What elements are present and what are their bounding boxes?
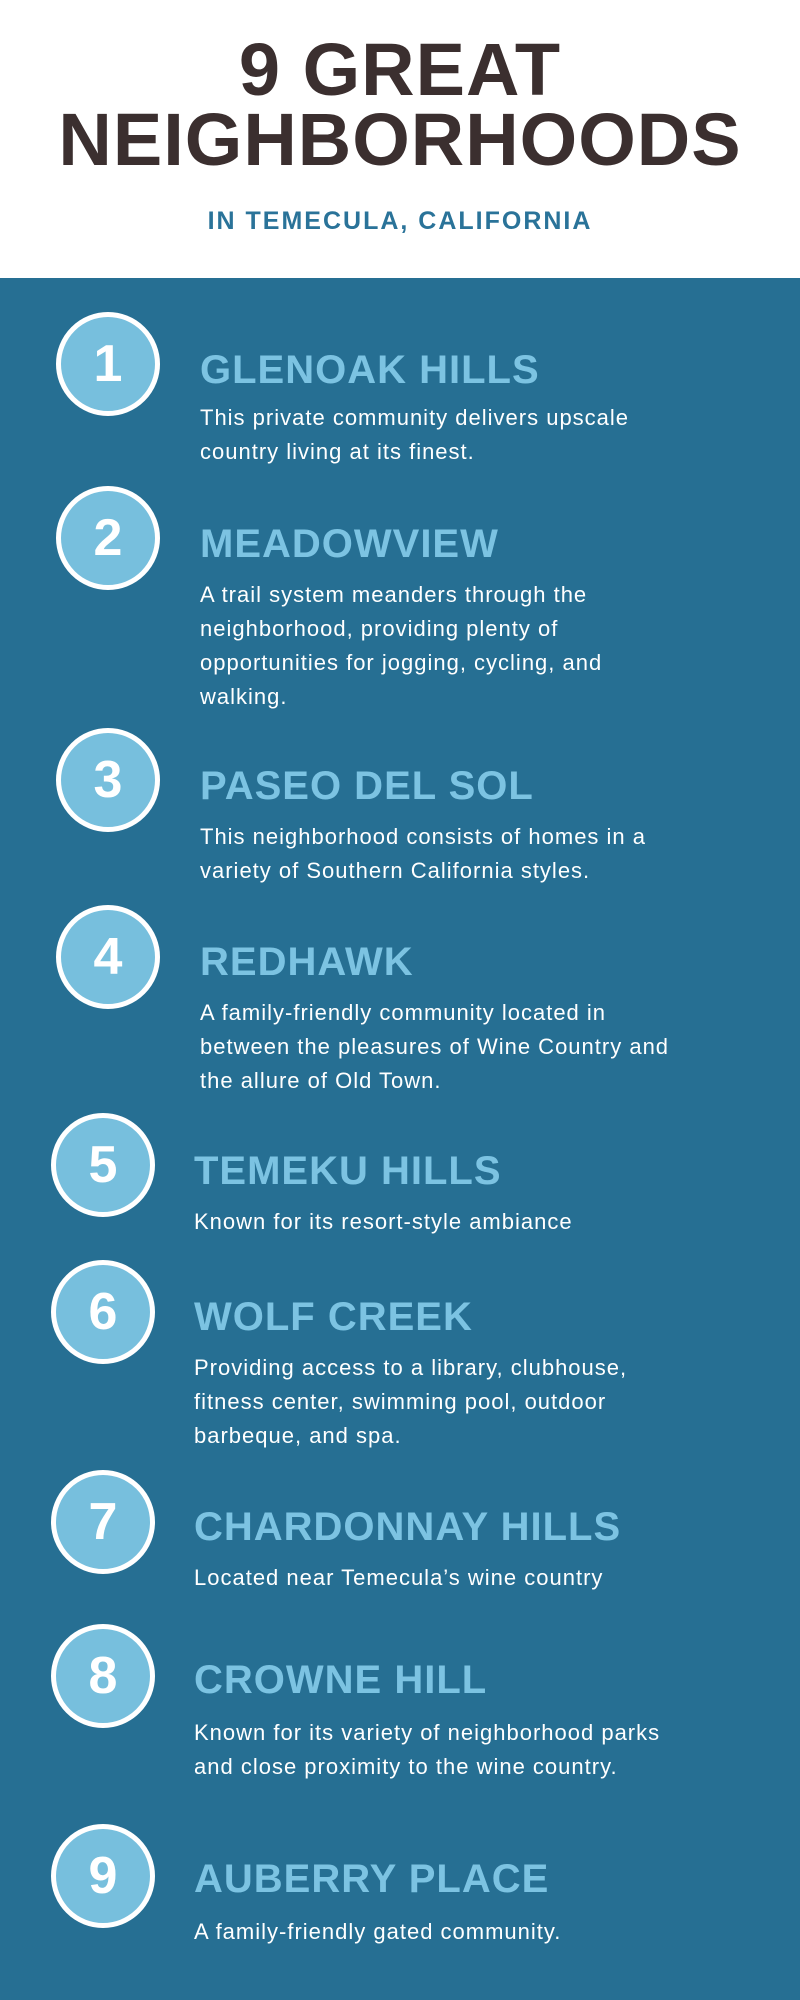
icon: circle 8: 8	[89, 1647, 117, 1705]
item 8	[51, 1624, 660, 1779]
item 2	[56, 486, 602, 709]
heading 9: AUBERRY PLACE	[194, 1857, 549, 1901]
item 1	[56, 312, 629, 464]
text 8: Known for its variety of neighborhood parks and close proximity to the wine country.	[194, 1720, 660, 1779]
item 9	[51, 1824, 561, 1944]
item 6	[51, 1260, 627, 1448]
icon: circle 3: 3	[94, 751, 122, 809]
icon: circle 1	[56, 312, 160, 416]
text 6: Providing access to a library, clubhouse, fitness center, swimming pool, outdoor barbeque, and spa.	[194, 1355, 627, 1448]
icon: circle 6: 6	[89, 1283, 117, 1341]
item 7	[51, 1470, 621, 1590]
icon: circle 2: 2	[94, 509, 122, 567]
icon: circle 5	[51, 1113, 155, 1217]
icon: circle 9	[51, 1824, 155, 1928]
item 4	[56, 905, 669, 1093]
icon: circle 3	[56, 728, 160, 832]
text 2: A trail system meanders through the neighborhood, providing plenty of opportunities for jogging, cycling, and walking.	[200, 582, 602, 709]
item 5	[51, 1113, 573, 1234]
heading 4: REDHAWK	[200, 940, 414, 984]
icon: circle 7	[51, 1470, 155, 1574]
heading 3: PASEO DEL SOL	[200, 764, 534, 808]
title: NEIGHBORHOODS	[58, 98, 742, 181]
icon: circle 2	[56, 486, 160, 590]
heading 5: TEMEKU HILLS	[194, 1149, 502, 1193]
icon: circle 4: 4	[94, 928, 122, 986]
heading 2: MEADOWVIEW	[200, 522, 499, 566]
text 3: This neighborhood consists of homes in a variety of Southern California styles.	[200, 824, 646, 883]
heading 6: WOLF CREEK	[194, 1295, 473, 1339]
text 1: This private community delivers upscale country living at its finest.	[200, 405, 629, 464]
icon: circle 8	[51, 1624, 155, 1728]
heading 8: CROWNE HILL	[194, 1658, 487, 1702]
text 4: A family-friendly community located in between the pleasures of Wine Country and the allure of Old Town.	[200, 1000, 669, 1093]
heading 7: CHARDONNAY HILLS	[194, 1505, 621, 1549]
item 3	[56, 728, 646, 883]
icon: circle 5: 5	[89, 1136, 117, 1194]
title	[58, 28, 742, 181]
icon: circle 1: 1	[94, 335, 122, 393]
subtitle: IN TEMECULA, CALIFORNIA	[208, 207, 592, 235]
text 9: A family-friendly gated community.	[194, 1919, 561, 1944]
icon: circle 6	[51, 1260, 155, 1364]
text 7: Located near Temecula’s wine country	[194, 1565, 603, 1590]
icon: circle 4	[56, 905, 160, 1009]
text 5: Known for its resort-style ambiance	[194, 1209, 573, 1234]
title: 9 GREAT	[239, 28, 561, 111]
icon: circle 7: 7	[89, 1493, 117, 1551]
heading 1: GLENOAK HILLS	[200, 348, 540, 392]
icon: circle 9: 9	[89, 1847, 117, 1905]
